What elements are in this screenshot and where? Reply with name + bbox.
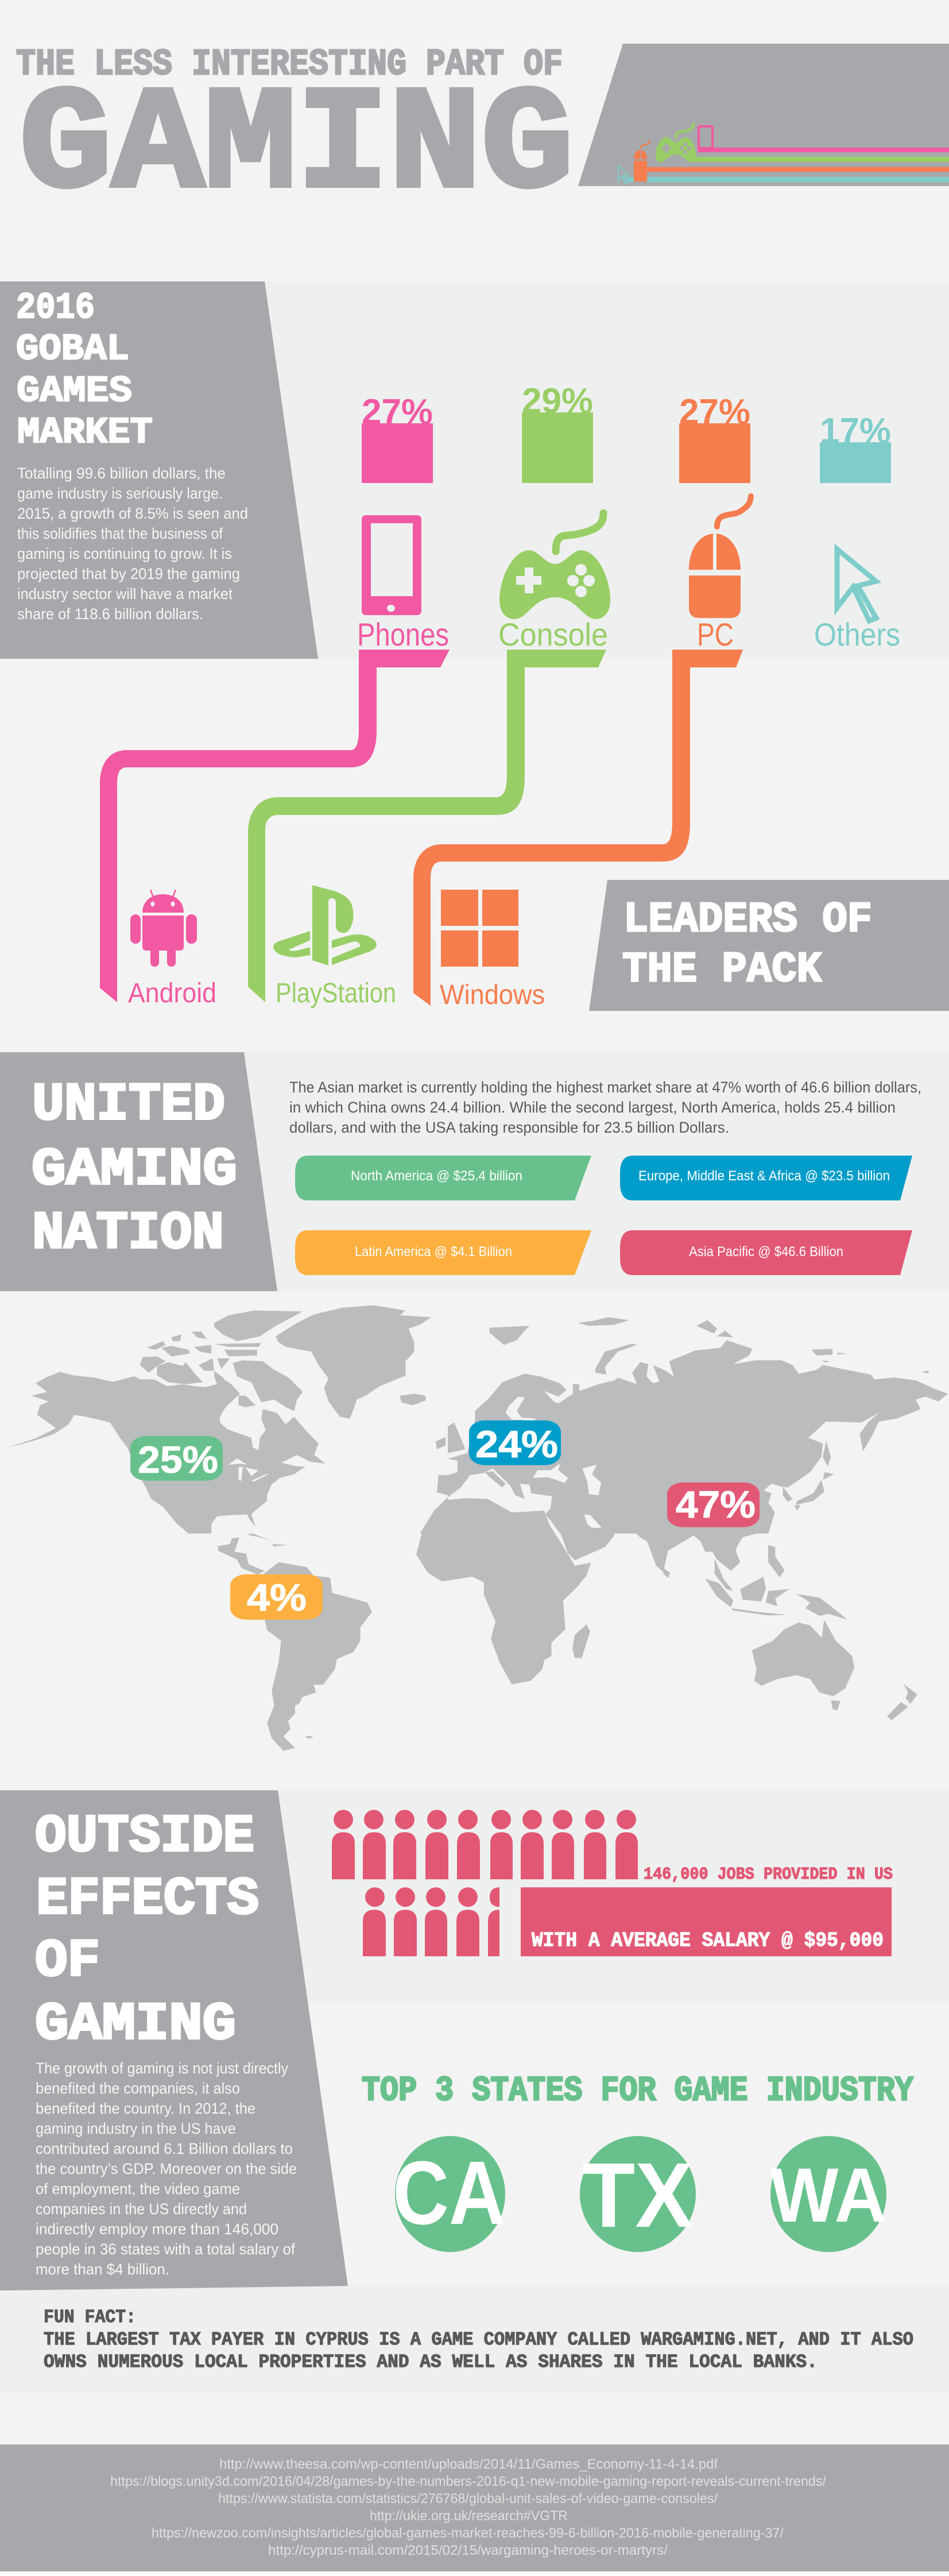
stripe: orange — [634, 167, 949, 172]
source links: https://newzoo.com/insights/articles/global-games-market-reaches-99-6-billion-2016-mobile-generating-37/ — [152, 2525, 784, 2541]
bar: pc 27% — [679, 392, 750, 483]
body text: economy effects: the country’s GDP. Moreover on the side — [36, 2160, 297, 2177]
heading: united gaming nation: NATION — [32, 1203, 224, 1264]
pill: asia pacific: Asia Pacific @ $46.6 Billion — [689, 1244, 843, 1260]
stripe: teal — [625, 177, 949, 182]
source links: http://cyprus-mail.com/2015/02/15/wargaming-heroes-or-martyrs/ — [268, 2543, 668, 2558]
body text: market summary: 2015, a growth of 8.5% is seen and — [17, 505, 248, 522]
body text: market summary: Totalling 99.6 billion dollars, the — [17, 465, 226, 482]
pictogram: jobs people row 2 — [363, 1887, 499, 1956]
bar: pc 27%: 27% — [679, 392, 750, 432]
bar: console 29%: 29% — [522, 381, 593, 421]
panel: jobs background — [0, 1790, 949, 2003]
body text: asian market — [289, 1079, 921, 1136]
source links: https://blogs.unity3d.com/2016/04/28/games-by-the-numbers-2016-q1-new-mobile-gaming-report-reveals-current-trends/ — [110, 2474, 826, 2489]
label: others: Others — [814, 616, 900, 652]
body text: market summary: share of 118.6 billion dollars. — [17, 605, 203, 623]
body text: economy effects: benefited the country. In 2012, the — [36, 2100, 255, 2117]
title word: gaming: GAMING — [20, 65, 574, 230]
title block — [16, 44, 574, 230]
pill: europe middle east africa — [620, 1156, 912, 1200]
pill: europe middle east africa: Europe, Middle East & Africa @ $23.5 billion — [638, 1168, 890, 1184]
heading: united gaming nation: GAMING — [32, 1140, 237, 1200]
icon: playstation — [273, 885, 377, 965]
ribbon arrow: console to playstation — [248, 650, 606, 1002]
icon: small cursor — [618, 166, 628, 184]
heading: 2016 global games market: 2016 — [16, 288, 95, 329]
ribbon arrow: pc to windows — [413, 650, 743, 1006]
bar: others 17% — [820, 411, 891, 483]
state badge: texas: TX — [582, 2144, 693, 2246]
body text: market summary: game industry is seriously large. — [17, 485, 223, 502]
bar: phones 27% — [362, 392, 433, 483]
map marker: latin america 4%: 4% — [247, 1576, 307, 1619]
panel: global games market — [0, 281, 949, 659]
body text: economy effects: of employment, the video game — [36, 2180, 240, 2197]
label: phones: Phones — [357, 616, 449, 652]
body text: economy effects: companies in the US directly and — [36, 2200, 247, 2218]
map marker: latin america 4% — [230, 1574, 323, 1620]
bar: console 29% — [522, 381, 593, 483]
heading: leaders of the pack: LEADERS OF — [623, 896, 872, 944]
source links: https://www.statista.com/statistics/276768/global-unit-sales-of-video-game-consoles/ — [218, 2491, 718, 2507]
state badge: california: CA — [393, 2143, 505, 2243]
pill: north america — [295, 1156, 591, 1200]
icon: android — [130, 890, 197, 967]
body text: market summary: projected that by 2019 the gaming — [17, 565, 240, 582]
body text: economy effects: indirectly employ more than 146,000 — [36, 2220, 278, 2238]
body text: economy effects: people in 36 states with a total salary of — [36, 2241, 295, 2258]
body text: asian market: The Asian market is currently holding the highest market share at 47% worth of 46.6 billion dollars, — [289, 1079, 921, 1096]
world map — [6, 1306, 948, 1751]
title line: the less interesting part of: THE LESS INTERESTING PART OF — [16, 44, 563, 86]
pill: latin america — [295, 1230, 591, 1275]
panel: fun fact background — [0, 2286, 949, 2392]
label: console: Console — [498, 616, 608, 652]
fun fact text — [44, 2307, 913, 2373]
heading: 2016 global games market: GOBAL — [16, 329, 129, 370]
body text: market summary: this solidifies that the business of — [17, 525, 223, 542]
body text: market summary: gaming is continuing to grow. It is — [17, 545, 232, 562]
heading: 2016 global games market: MARKET — [17, 412, 153, 454]
fun fact text: THE LARGEST TAX PAYER IN CYPRUS IS A GAME COMPANY CALLED WARGAMING.NET, AND IT ALSO — [44, 2329, 913, 2350]
icon: windows — [441, 890, 518, 967]
body text: economy effects: benefited the companies, it also — [36, 2080, 240, 2097]
pill: latin america: Latin America @ $4.1 Billion — [355, 1244, 512, 1260]
panel: sources — [0, 2444, 949, 2571]
icon: cursor — [837, 549, 876, 621]
body text: economy effects: gaming industry in the US have — [36, 2120, 236, 2137]
source links: http://www.theesa.com/wp-content/uploads/2014/11/Games_Economy-11-4-14.pdf — [219, 2457, 718, 2472]
pill: north america: North America @ $25.4 billion — [351, 1168, 522, 1184]
label: pc: PC — [697, 616, 734, 652]
stripe: pink — [698, 148, 949, 152]
panel: leaders of the pack — [589, 880, 949, 1011]
heading: outside effects of gaming: GAMING — [35, 1994, 236, 2054]
heading: outside effects of gaming: OF — [35, 1931, 100, 1991]
grey sidebar — [0, 1052, 277, 1291]
ribbon arrow: phones to android — [100, 650, 450, 1002]
map marker: north america 25%: 25% — [138, 1438, 218, 1481]
stat: 146,000 jobs: 146,000 JOBS PROVIDED IN US — [644, 1865, 893, 1884]
body text: economy effects — [36, 2060, 297, 2278]
icon: mouse — [689, 496, 751, 618]
icon: game controller — [499, 513, 610, 619]
body text: asian market: in which China owns 24.4 billion. While the second largest, North America, holds 25.4 billion — [289, 1099, 896, 1116]
pictogram: jobs people row 1 — [332, 1810, 638, 1879]
stripe: green — [689, 157, 949, 162]
heading: leaders of the pack — [622, 896, 872, 994]
pill: asia pacific — [620, 1230, 912, 1275]
stat block: average salary — [521, 1887, 892, 1956]
source links — [110, 2457, 826, 2558]
source links: http://ukie.org.uk/research#VGTR — [370, 2508, 568, 2524]
heading: leaders of the pack: THE PACK — [622, 946, 822, 994]
icon: small mouse — [634, 140, 650, 181]
fun fact text: FUN FACT: — [44, 2307, 136, 2328]
heading: outside effects of gaming: EFFECTS — [36, 1869, 259, 1929]
label: playstation: PlayStation — [276, 978, 396, 1009]
heading: 2016 global games market: GAMES — [17, 371, 132, 412]
header banner with icons and stripes — [578, 44, 949, 186]
map marker: asia pacific 47%: 47% — [676, 1483, 756, 1525]
body text: economy effects: more than $4 billion. — [36, 2261, 169, 2278]
heading: outside effects of gaming — [35, 1806, 259, 2054]
body text: economy effects: The growth of gaming is not just directly — [36, 2060, 288, 2077]
heading: united gaming nation: UNITED — [32, 1075, 225, 1135]
icon: small phone — [698, 126, 714, 152]
state badge: washington: WA — [770, 2153, 886, 2238]
fun fact text: OWNS NUMEROUS LOCAL PROPERTIES AND AS WELL AS SHARES IN THE LOCAL BANKS. — [44, 2351, 818, 2373]
body text: asian market: dollars, and with the USA taking responsible for 23.5 billion Dollars. — [289, 1119, 729, 1136]
stat block: average salary: WITH A AVERAGE SALARY @ $95,000 — [532, 1929, 884, 1952]
panel: united gaming nation — [0, 1052, 949, 1291]
panel: outside effects of gaming — [0, 1790, 348, 2291]
icon: small controller — [656, 123, 696, 162]
map marker: europe 24%: 24% — [475, 1423, 558, 1465]
icon: phone — [362, 515, 421, 615]
bar: phones 27%: 27% — [362, 392, 433, 432]
heading: outside effects of gaming: OUTSIDE — [35, 1806, 254, 1867]
bar: others 17%: 17% — [820, 411, 891, 451]
body text: market summary: industry sector will have a market — [17, 585, 233, 603]
grey sidebar — [0, 281, 318, 659]
body text: economy effects: contributed around 6.1 Billion dollars to — [36, 2140, 293, 2157]
label: windows: Windows — [440, 980, 545, 1010]
heading: 2016 global games market — [16, 288, 153, 454]
heading: united gaming nation — [32, 1075, 237, 1264]
body text: market summary — [17, 465, 248, 623]
label: android: Android — [128, 978, 216, 1009]
